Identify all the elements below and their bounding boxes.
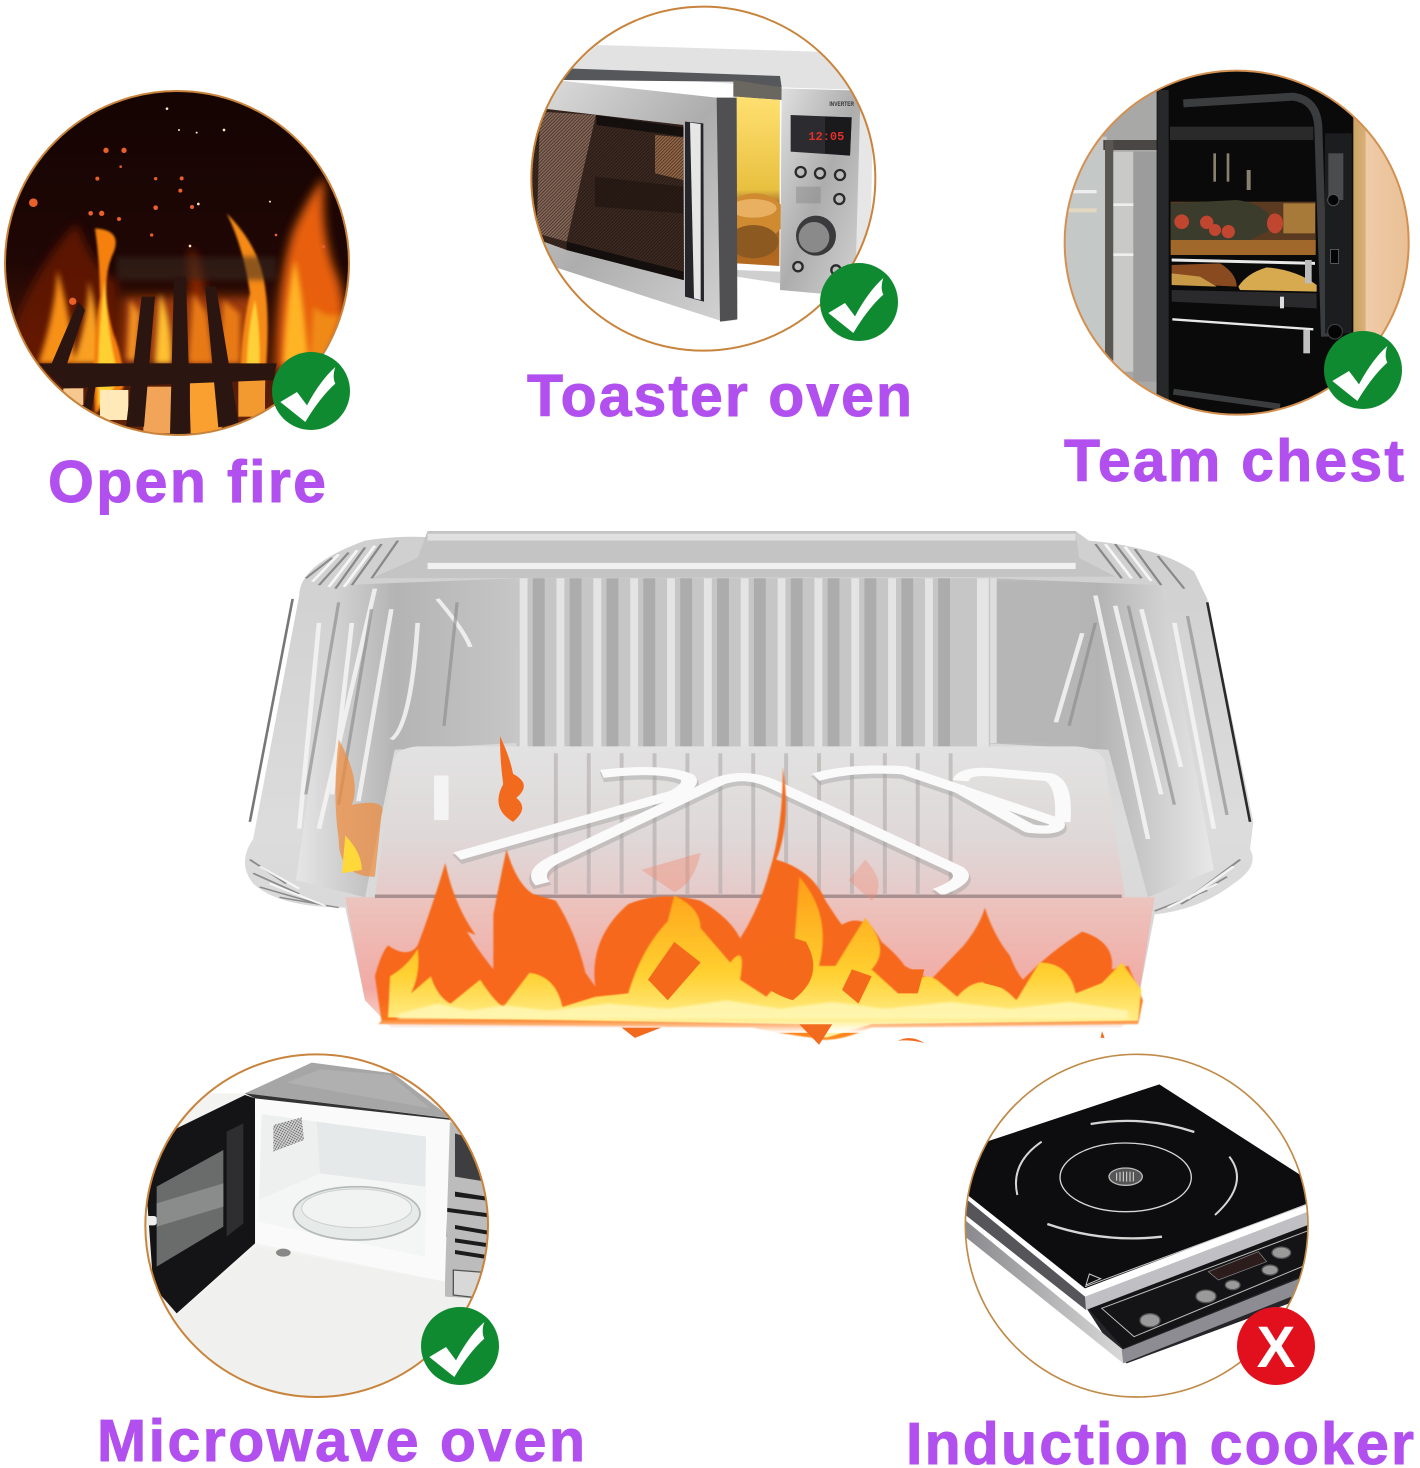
- stray embers below the pan: [622, 1024, 1105, 1045]
- fire: main orange body: [375, 767, 1143, 1040]
- badge: check: [272, 352, 350, 430]
- silver trim: [1085, 1208, 1317, 1310]
- aluminium foil pan: [245, 531, 1253, 1045]
- logs under the grate: [63, 388, 83, 405]
- badge: check: [820, 263, 898, 341]
- photo: flames over a grill grate: [0, 87, 353, 440]
- counter surface: [445, 1296, 446, 1297]
- grill grate bars: [38, 277, 277, 434]
- photo: open stainless toaster oven: INVERTER: [829, 101, 854, 108]
- fire: bright base: [398, 1000, 1128, 1019]
- fire: yellow inner flames: [388, 877, 1141, 1038]
- panel: microwave oven: [97, 1040, 585, 1468]
- embossed triangles on the floor: [434, 770, 1063, 896]
- panel: induction cooker: [906, 1040, 1414, 1468]
- label: team chest: Team chest: [1064, 428, 1404, 494]
- badge: not compatible: [1237, 1307, 1315, 1385]
- foil wrinkles: [299, 589, 1214, 839]
- door: [527, 78, 737, 322]
- interior: [442, 1120, 450, 1279]
- right control panel: [445, 1122, 487, 1298]
- left wall: [296, 578, 516, 897]
- panel: toaster oven: [520, 0, 912, 429]
- glass top: [963, 1084, 1317, 1288]
- badge: not compatible: X: [1257, 1315, 1296, 1380]
- front wall: [345, 897, 1155, 1028]
- roast and tomatoes on upper rack: [1171, 202, 1316, 253]
- soft fade under the pan: [339, 1019, 1161, 1033]
- badge: check: [421, 1307, 499, 1385]
- photo: open stainless toaster oven: [520, 0, 887, 360]
- door frame: [1183, 97, 1325, 337]
- pan floor: [375, 746, 1125, 897]
- oven interior: [737, 97, 780, 266]
- fire: orange licks over the yellow: [648, 937, 1010, 1004]
- badge: check: [1324, 331, 1402, 409]
- control strip: [1087, 1220, 1317, 1348]
- back wall with ribs: [516, 578, 990, 750]
- lower rack with baked food: [1172, 260, 1315, 263]
- dark outer edge strips: [1207, 602, 1250, 822]
- open door: [143, 1095, 255, 1313]
- control knob: [796, 216, 836, 256]
- photo: open white microwave: [144, 1053, 489, 1398]
- door handle: [685, 122, 704, 302]
- pan silhouette: [245, 531, 1253, 1028]
- control panel: [856, 111, 872, 255]
- panel: foil pan with flames: [245, 531, 1253, 1045]
- panel: team chest: [1064, 70, 1410, 482]
- photo: open stainless toaster oven: 12:05: [808, 130, 844, 144]
- crimped rim corners: [250, 541, 1240, 911]
- label: open fire: Open fire: [48, 449, 326, 515]
- photo: black induction cooktop: [964, 1054, 1309, 1398]
- sparks: [29, 148, 325, 305]
- panel: open fire: [0, 87, 353, 515]
- back rim strip: [372, 531, 1115, 578]
- warning triangle: [1086, 1274, 1101, 1285]
- cooktop ring markings: [1016, 1121, 1237, 1238]
- label: toaster oven: Toaster oven: [527, 363, 912, 429]
- photo: steam oven with racks of food: [1064, 70, 1410, 416]
- smoky band: [117, 257, 277, 280]
- base and edge: [963, 1213, 1317, 1363]
- right wall: [984, 578, 1214, 897]
- fire: tongues rising on the floor and side wall: [335, 736, 879, 901]
- centre coil logo: [1109, 1168, 1142, 1185]
